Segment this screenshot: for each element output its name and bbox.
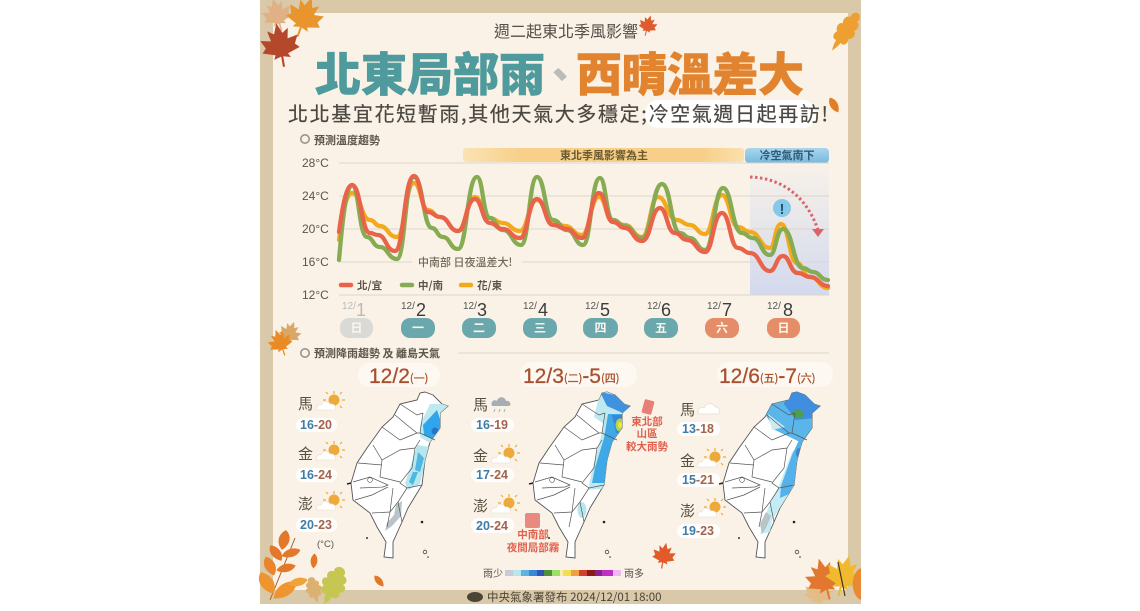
footer: 中央氣象署發布 2024/12/01 18:00	[487, 589, 661, 605]
y axis labels	[302, 156, 329, 302]
date label: (五)	[760, 370, 778, 386]
y axis labels: 28°C	[302, 156, 329, 170]
temperature line chart	[302, 156, 829, 302]
separator: 、	[540, 43, 580, 101]
chart note: 中南部 日夜溫差大!	[418, 254, 512, 270]
panel: 12/6-7	[677, 362, 833, 558]
banner: cold air: 冷空氣南下	[760, 147, 814, 163]
date label: (四)	[601, 370, 619, 386]
date axis: 12/	[523, 301, 537, 312]
legend: 中/南	[418, 278, 443, 293]
date axis: 5	[600, 300, 610, 320]
date axis: 12/	[401, 301, 415, 312]
unit: (°C)	[317, 539, 334, 550]
date label: (二)	[564, 370, 582, 386]
weekday pills: 日	[350, 319, 363, 336]
decorative leaves bottom right	[801, 551, 867, 611]
Taiwan rain map	[529, 392, 640, 558]
rain legend: 雨少	[483, 565, 503, 580]
date axis: 12/	[707, 301, 721, 312]
callout: northeast mountains	[626, 399, 668, 454]
date axis: 12/	[342, 301, 356, 312]
island: 金	[677, 448, 726, 487]
banner: northeast monsoon	[463, 147, 744, 163]
weekday pills	[340, 318, 800, 338]
section heading: rain	[301, 345, 829, 361]
weekday pills: 三	[534, 319, 546, 336]
date label: 12/3	[523, 365, 564, 388]
decorative leaf top right	[824, 8, 866, 56]
line: 花/東	[339, 183, 828, 288]
island: 金: 金	[473, 445, 488, 466]
date label: 12/6	[719, 365, 760, 388]
subtitle: 北北基宜花短暫雨,其他天氣大多穩定;冷空氣週日起再訪!	[288, 98, 828, 127]
date axis: 12/	[647, 301, 661, 312]
date axis: 12/	[767, 301, 781, 312]
decorative leaves bottom left	[255, 529, 386, 610]
decorative leaves mid left	[265, 318, 304, 359]
section heading: rain: 預測降雨趨勢 及 離島天氣	[314, 345, 440, 361]
section heading: temperature: 預測溫度趨勢	[314, 132, 380, 148]
island: 金: 15-21	[682, 473, 714, 487]
date label: (一)	[410, 370, 428, 386]
island: 澎: 20-23	[300, 518, 332, 532]
weekday pills: 二	[473, 319, 485, 336]
island: 澎: 澎	[680, 500, 695, 521]
date axis: 2	[416, 300, 426, 320]
line: 北/宜	[339, 176, 828, 286]
callout: northeast mountains: 山區	[636, 426, 658, 441]
y axis labels: 24°C	[302, 189, 329, 203]
cold air dotted arrow	[750, 177, 824, 237]
Taiwan rain map	[719, 392, 821, 558]
legend: 北/宜	[357, 278, 382, 293]
title	[315, 39, 804, 105]
panel: 12/2	[296, 363, 450, 558]
date axis	[342, 300, 793, 320]
callout: south central fog	[507, 513, 560, 555]
island: 澎: 澎	[298, 493, 313, 514]
date axis: 12/	[585, 301, 599, 312]
date label: (六)	[797, 370, 815, 386]
date label: -7	[778, 365, 797, 388]
island: 馬	[296, 391, 345, 432]
island: 澎	[296, 491, 345, 532]
weekday pills: 一	[412, 319, 424, 336]
island: 金	[296, 441, 345, 482]
island: 金: 17-24	[476, 468, 508, 482]
subtitle highlight pill	[645, 100, 816, 128]
island: 澎: 20-24	[476, 519, 508, 533]
legend	[341, 278, 503, 293]
date label	[717, 362, 833, 388]
island: 金: 16-24	[300, 468, 332, 482]
y axis labels: 20°C	[302, 222, 329, 236]
frame background	[260, 0, 861, 604]
panel: 12/3-5	[471, 362, 668, 558]
date axis: 12/	[463, 301, 477, 312]
date axis: 4	[538, 300, 548, 320]
rain legend: 雨多	[624, 565, 644, 580]
date axis: 6	[661, 300, 671, 320]
weekday pills: 四	[594, 319, 607, 336]
weekday pills: 日	[777, 319, 790, 336]
island: 馬: 16-20	[300, 418, 332, 432]
island: 金	[471, 444, 520, 482]
island: 澎	[471, 494, 520, 533]
cold air shaded region	[750, 165, 829, 295]
date label	[358, 363, 440, 388]
island: 馬: 馬	[298, 393, 313, 414]
island: 金: 金	[680, 450, 695, 471]
decorative small leaf by subtitle	[826, 96, 842, 114]
banner: northeast monsoon: 東北季風影響為主	[560, 147, 648, 163]
island: 馬: 13-18	[682, 422, 714, 436]
legend: 花/東	[477, 278, 503, 293]
date axis: 3	[477, 300, 487, 320]
title: 北東局部雨	[315, 39, 545, 105]
island: 馬: 馬	[473, 394, 488, 415]
alert icon	[773, 199, 791, 218]
decorative leaf center bottom	[651, 541, 677, 570]
banner: cold air	[745, 147, 829, 163]
callout: northeast mountains: 東北部	[631, 414, 663, 429]
callout: south central fog: 中南部	[517, 527, 549, 542]
island: 金: 金	[298, 443, 313, 464]
island: 澎: 澎	[473, 495, 488, 516]
weekday pills: 六	[716, 319, 728, 336]
title: 西晴溫差大	[576, 39, 804, 105]
alert icon: !	[780, 201, 784, 218]
decorative small leaf by heading	[636, 13, 659, 38]
decorative leaves top left	[258, 0, 329, 70]
Taiwan rain map	[347, 392, 450, 558]
y axis labels: 16°C	[302, 255, 329, 269]
date label	[520, 362, 637, 388]
island: 馬	[677, 399, 720, 436]
weekday pills: 五	[655, 319, 667, 336]
date label: -5	[582, 365, 601, 388]
island: 馬: 馬	[680, 399, 695, 420]
callout: south central fog: 夜間局部霧	[507, 540, 560, 555]
island: 馬	[471, 394, 514, 432]
island: 馬: 16-19	[476, 418, 508, 432]
date axis: 1	[356, 300, 366, 320]
island: 澎: 19-23	[682, 524, 714, 538]
date axis: 8	[783, 300, 793, 320]
y axis labels: 12°C	[302, 288, 329, 302]
rain legend	[483, 565, 644, 580]
island: 澎	[677, 498, 726, 538]
callout: northeast mountains: 較大雨勢	[626, 439, 668, 454]
date axis: 7	[722, 300, 732, 320]
date label: 12/2	[369, 365, 410, 388]
kicker heading: 週二起東北季風影響	[494, 18, 638, 42]
line: 中/南	[339, 177, 828, 280]
